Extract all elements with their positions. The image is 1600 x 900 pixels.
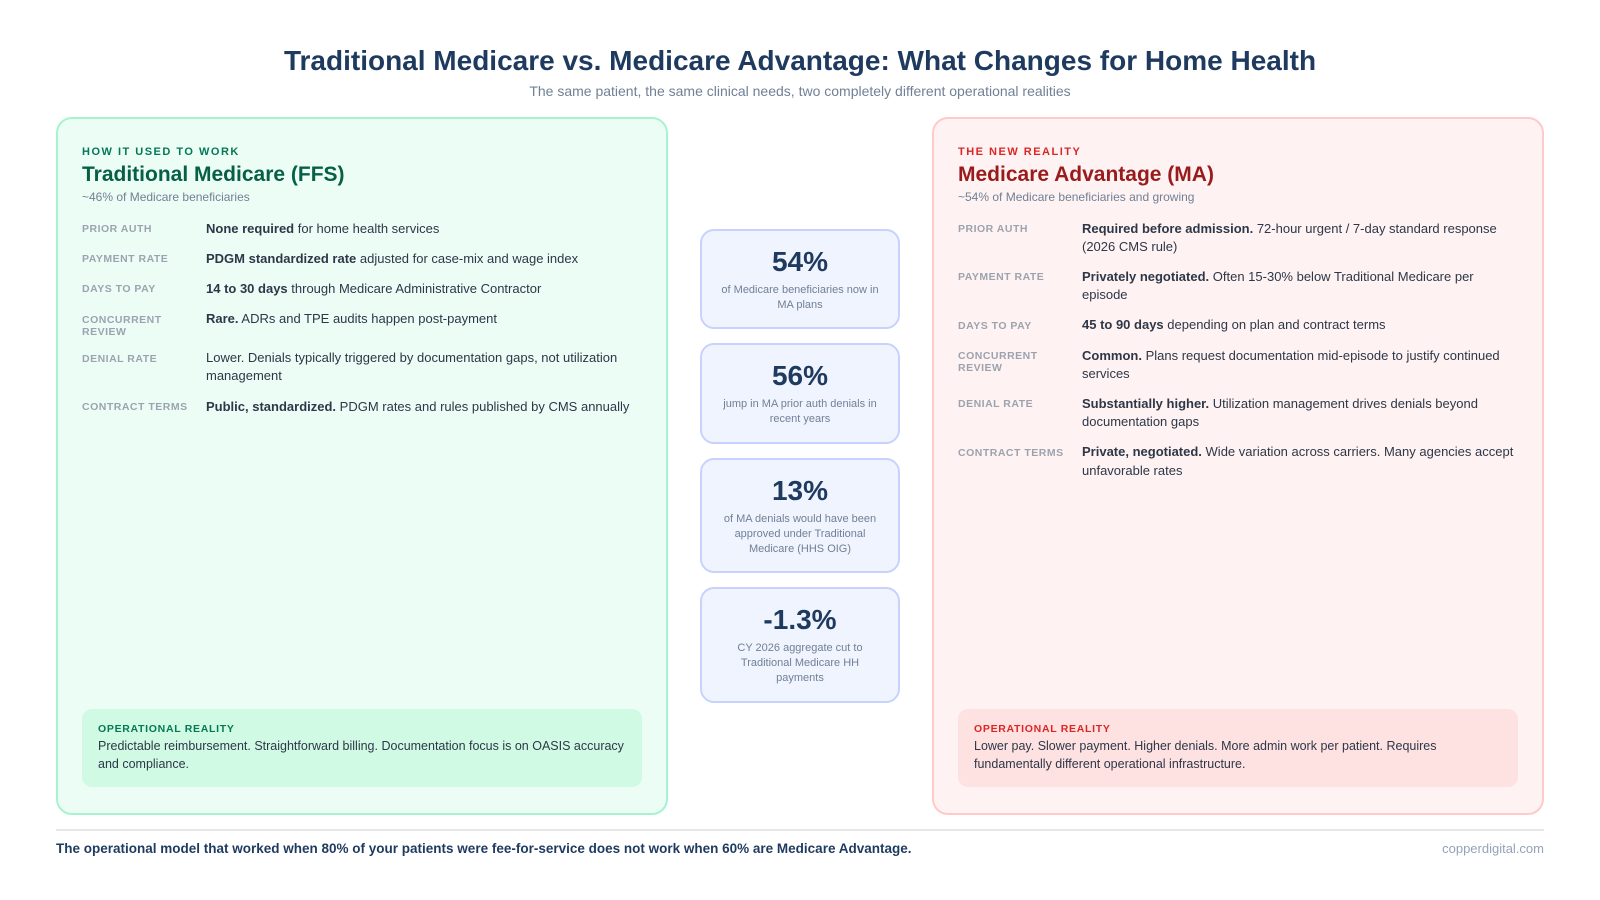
stat card: 54%: of Medicare beneficiaries now in MA plans: [721, 284, 879, 311]
stat card: 13%: of MA denials would have been approved under Traditional Medicare (HHS OIG): [724, 513, 876, 555]
row: contract terms: CONTRACT TERMS: [82, 401, 188, 413]
comparison rows: [958, 221, 1514, 478]
callout text: Lower pay. Slower payment. Higher denials. More admin work per patient. Requires fundamentally different operational infrastructure.: [974, 739, 1436, 771]
callout title: OPERATIONAL REALITY: [98, 723, 235, 735]
stat card: -1.3%: -1.3%: [763, 604, 837, 635]
main comparison area: [56, 117, 1544, 815]
callout title: OPERATIONAL REALITY: [974, 723, 1111, 735]
callout text: Predictable reimbursement. Straightforward billing. Documentation focus is on OASIS accuracy and compliance.: [98, 739, 624, 771]
panel: traditional medicare: [56, 117, 668, 815]
row: concurrent review: REVIEW: [82, 326, 126, 338]
stat card: -1.3%: [700, 587, 900, 703]
row: concurrent review: [82, 311, 497, 338]
stat card: 13%: 13%: [772, 475, 828, 506]
row: prior auth: None required for home health services: [206, 221, 439, 236]
row: denial rate: Lower. Denials typically triggered by documentation gaps, not utilization management: [206, 350, 617, 383]
stat card: 56%: [700, 343, 900, 444]
row: concurrent review: CONCURRENT: [958, 350, 1038, 362]
row: payment rate: Privately negotiated. Often 15-30% below Traditional Medicare per episode: [1082, 269, 1474, 302]
stat card: 54%: [700, 229, 900, 329]
row: prior auth: [82, 221, 439, 236]
row: contract terms: Private, negotiated. Wide variation across carriers. Many agencies accept unfavorable rates: [1082, 444, 1513, 478]
stat card: 56%: jump in MA prior auth denials in recent years: [723, 398, 877, 425]
row: days to pay: 14 to 30 days through Medicare Administrative Contractor: [206, 281, 541, 296]
row: days to pay: DAYS TO PAY: [958, 320, 1032, 332]
eyebrow: THE NEW REALITY: [958, 146, 1081, 158]
row: days to pay: DAYS TO PAY: [82, 283, 156, 295]
center stats column: [700, 229, 900, 703]
row: payment rate: PDGM standardized rate adjusted for case-mix and wage index: [206, 251, 578, 266]
row: denial rate: Substantially higher. Utilization management drives denials beyond documentation gaps: [1082, 396, 1478, 429]
panel: medicare advantage: [932, 117, 1544, 815]
row: concurrent review: Common. Plans request documentation mid-episode to justify continued services: [1082, 348, 1500, 381]
beneficiary share: ~46% of Medicare beneficiaries: [82, 190, 250, 204]
row: concurrent review: Rare. ADRs and TPE audits happen post-payment: [206, 311, 497, 326]
callout: operational reality: [958, 709, 1518, 787]
row: contract terms: CONTRACT TERMS: [958, 447, 1064, 459]
callout: operational reality: [82, 709, 642, 787]
row: payment rate: PAYMENT RATE: [958, 271, 1044, 283]
row: contract terms: Public, standardized. PDGM rates and rules published by CMS annually: [206, 399, 629, 414]
stat card: 54%: 54%: [772, 246, 828, 277]
row: payment rate: PAYMENT RATE: [82, 253, 168, 265]
beneficiary share: ~54% of Medicare beneficiaries and growing: [958, 190, 1194, 204]
header: [284, 45, 1316, 99]
row: denial rate: DENIAL RATE: [82, 353, 157, 365]
stat card: -1.3%: CY 2026 aggregate cut to Traditional Medicare HH payments: [737, 642, 863, 684]
eyebrow: HOW IT USED TO WORK: [82, 146, 240, 158]
footer: [56, 829, 1544, 857]
row: concurrent review: REVIEW: [958, 362, 1002, 374]
stat card: 13%: [700, 458, 900, 573]
row: prior auth: PRIOR AUTH: [82, 223, 152, 235]
panel heading: Medicare Advantage (MA): [958, 163, 1214, 186]
subtitle: The same patient, the same clinical needs, two completely different operational realities: [529, 83, 1071, 99]
panel heading: Traditional Medicare (FFS): [82, 163, 345, 186]
footer takeaway: The operational model that worked when 80% of your patients were fee-for-service does not work when 60% are Medicare Advantage.: [56, 841, 911, 856]
footer source: copperdigital.com: [1442, 841, 1544, 856]
row: concurrent review: CONCURRENT: [82, 314, 162, 326]
stat card: 56%: 56%: [772, 360, 828, 391]
title: Traditional Medicare vs. Medicare Advantage: What Changes for Home Health: [284, 45, 1316, 76]
row: denial rate: DENIAL RATE: [958, 398, 1033, 410]
row: prior auth: PRIOR AUTH: [958, 223, 1028, 235]
row: days to pay: 45 to 90 days depending on plan and contract terms: [1082, 317, 1386, 332]
row: prior auth: Required before admission. 72-hour urgent / 7-day standard response (2026 CMS rule): [1082, 221, 1497, 254]
comparison rows: [82, 221, 630, 414]
